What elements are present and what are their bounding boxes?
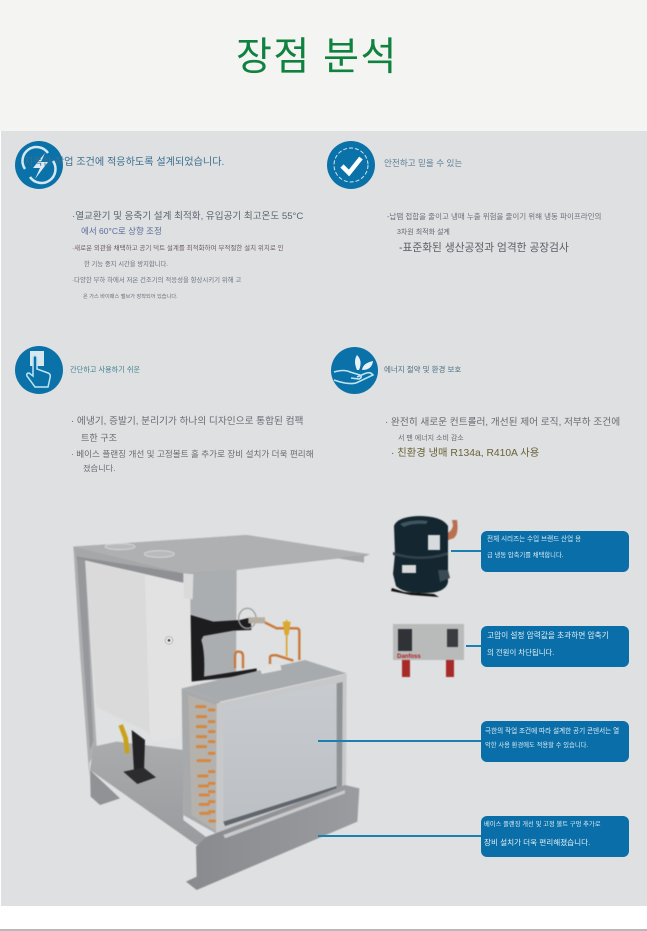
- bullet 2 continuation: 한 기능 중지 시간을 방지합니다.: [84, 261, 168, 268]
- heading: 에너지 절약 및 환경 보호: [384, 365, 461, 374]
- bullet 1: · 에냉기, 증발기, 분리기가 하나의 디자인으로 통합된 컴팩: [71, 416, 303, 427]
- bullet 2: · 친환경 냉매 R134a, R410A 사용: [391, 448, 539, 459]
- panel: harsh working conditions: [15, 141, 303, 300]
- icon: pointing finger: [15, 346, 63, 394]
- base left leg: [90, 770, 120, 805]
- bullet 1: · 완전히 새로운 컨트롤러, 개선된 제어 로직, 저부하 조건에: [385, 417, 620, 428]
- copper pipes: [235, 620, 299, 668]
- expansion valve: [239, 608, 265, 628]
- heading: 안전하고 믿을 수 있는: [384, 158, 462, 168]
- panel: energy saving: [331, 347, 620, 459]
- icon: lightning in arrows: [15, 141, 63, 189]
- callout: condenser: 극한의 작업 조건에 따라 설계한 공기 콘덴서는 열: [485, 728, 619, 735]
- bullet 1: ·열교환기 및 응축기 설계 최적화, 유입공기 최고온도 55°C: [72, 211, 303, 222]
- callout: base: 장비 설치가 더욱 편리해졌습니다.: [484, 838, 590, 847]
- condenser fins: [223, 683, 339, 823]
- bullet 2: ·새로운 외관을 채택하고 공기 덕트 설계를 최적화하여 부적절한 설치 위치로 인: [72, 245, 284, 252]
- bullet 1 continuation: 트한 구조: [81, 433, 117, 443]
- footer strip: [0, 929, 647, 931]
- callout: base: [481, 816, 629, 857]
- callout: pressure switch: 고압이 설정 압력값을 초과하면 압축기: [487, 631, 609, 640]
- condenser side with copper tube ends: [182, 688, 222, 837]
- callout: pressure switch: [481, 626, 629, 667]
- condenser front frame: [216, 674, 347, 837]
- heading: 간단하고 사용하기 쉬운: [70, 365, 140, 374]
- condenser top: [182, 660, 347, 702]
- bullet 1 continuation: 에서 60°C로 상향 조정: [81, 226, 162, 236]
- icon: compressor: [390, 515, 458, 598]
- bullet 2 continuation: 졌습니다.: [83, 464, 115, 473]
- illustration: cold dryer unit: [73, 534, 370, 890]
- callout: compressor: [481, 531, 629, 572]
- callout: condenser: 악한 사용 환경에도 적용할 수 있습니다.: [485, 742, 588, 749]
- callout: compressor: 급 냉동 압축기를 채택합니다.: [487, 552, 564, 559]
- callout: base: 베이스 플랜징 개선 및 고정 볼트 구멍 추가로: [484, 821, 601, 828]
- support post: [121, 725, 156, 784]
- top sheet: [73, 535, 370, 599]
- floor plate: [90, 742, 210, 845]
- icon: pressure switch: Danfoss: [397, 654, 421, 660]
- insulated box: [85, 560, 192, 743]
- icon: check badge: [327, 141, 375, 189]
- black pipework: [191, 615, 257, 682]
- panel: safe and reliable: [327, 141, 601, 254]
- header band: [0, 0, 647, 131]
- bullet 3: ·다양한 부하 하에서 저온 건조기의 적응성을 향상시키기 위해 고: [72, 277, 241, 284]
- bullet 3 continuation: 온 가스 바이패스 밸브가 장착되어 있습니다.: [83, 294, 178, 300]
- icon: pressure switch: [392, 624, 464, 678]
- callout: condenser: [481, 721, 629, 762]
- base front skirt: [186, 785, 359, 890]
- callout: compressor: 전체 시리즈는 수입 브랜드 산업 용: [487, 536, 581, 543]
- left side frame: [73, 547, 97, 777]
- bullet 1 continuation: 서 팬 에너지 소비 감소: [398, 435, 464, 442]
- callout: pressure switch: 의 전원이 차단됩니다.: [487, 648, 554, 657]
- panel: easy to use: [15, 346, 314, 473]
- bullet 1 continuation: 3차원 최적화 설계: [397, 229, 450, 236]
- bullet 2: -표준화된 생산공정과 엄격한 공장검사: [399, 242, 569, 254]
- bullet 1: -납땜 접합을 줄이고 냉매 누출 위험을 줄이기 위해 냉동 파이프라인의: [387, 212, 601, 221]
- connector lines: [318, 550, 481, 837]
- heading: 지독한 작업 조건에 적응하도록 설계되었습니다.: [24, 157, 224, 168]
- title: 장점 분석: [236, 36, 398, 79]
- filter drier: [283, 622, 291, 635]
- connector block: [260, 664, 282, 674]
- rear column: [190, 567, 237, 680]
- icon: hand with leaves: [331, 347, 378, 394]
- bullet 2: · 베이스 플랜징 개선 및 고정볼트 홀 추가로 장비 설치가 더욱 편리해: [71, 449, 314, 459]
